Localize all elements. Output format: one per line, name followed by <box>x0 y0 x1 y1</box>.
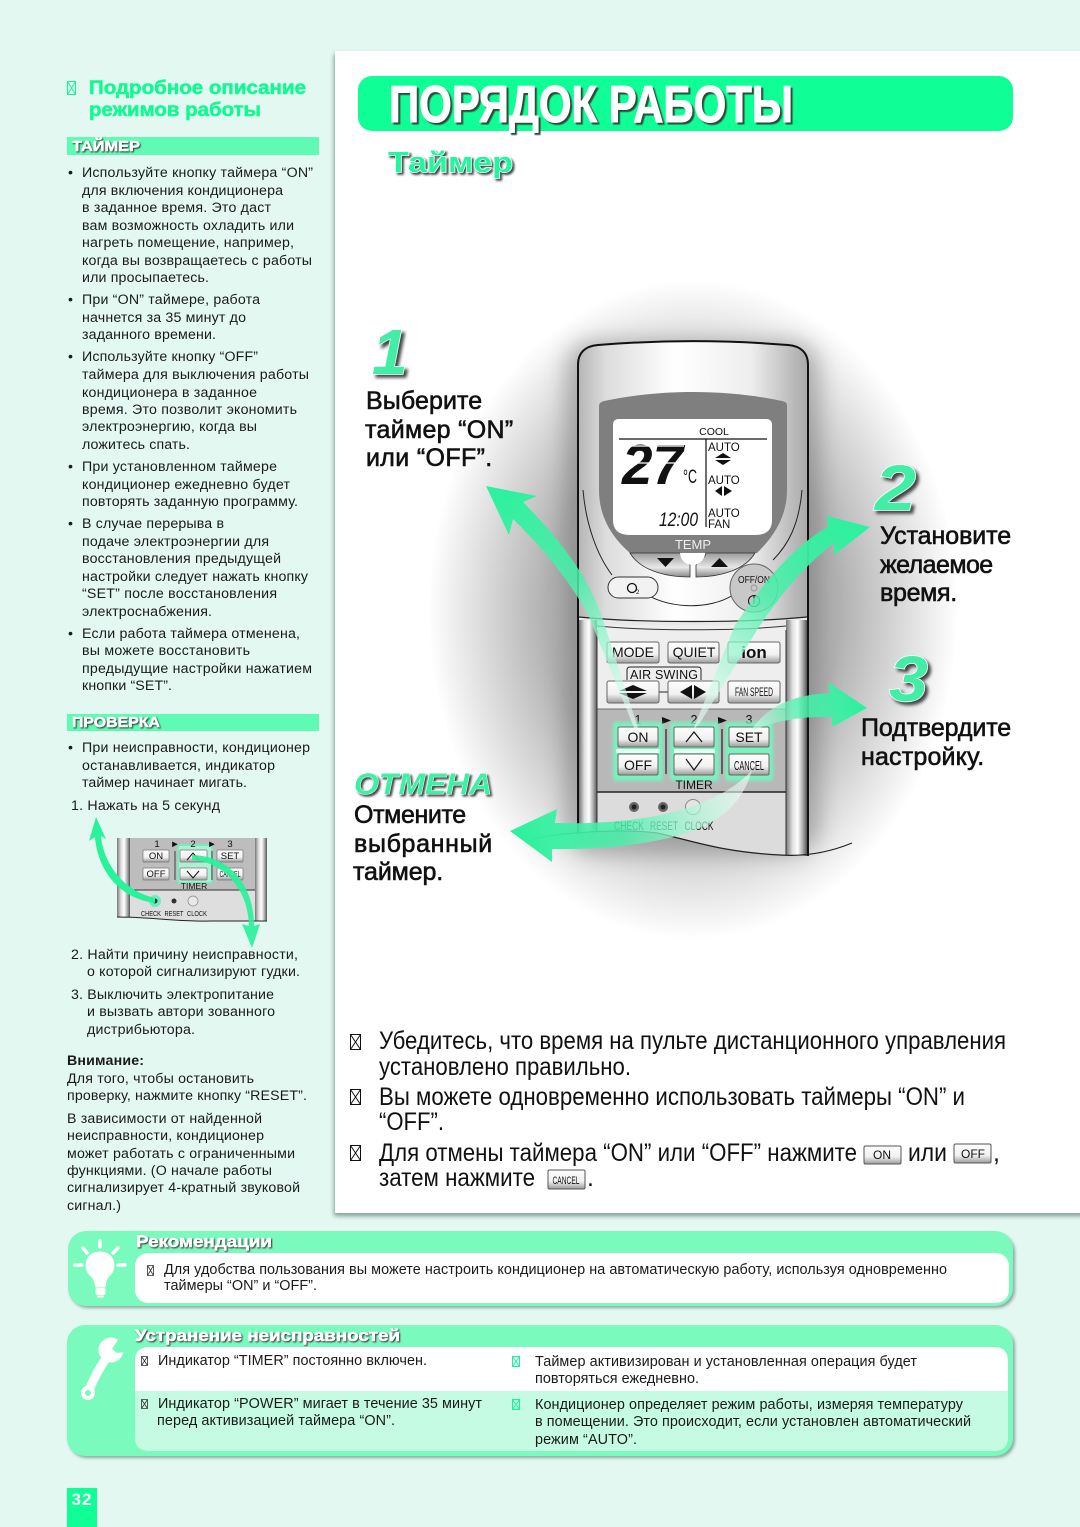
text block: timer instructions: • <box>68 516 73 532</box>
section bar: ТАЙМЕР: ТАЙМЕР <box>72 137 140 155</box>
mode buttons: AIR SWING <box>630 668 698 682</box>
inline ON key: ON <box>873 1148 891 1162</box>
text block: timer instructions: восстановления предыдущей <box>82 551 281 567</box>
notes list: Для отмены таймера “ON” или “OFF” нажмите <box>379 1139 857 1167</box>
text block: timer instructions: в заданное время. Это даст <box>82 200 272 216</box>
text block: timer instructions <box>68 165 313 694</box>
cancel text: выбранный <box>354 830 493 858</box>
text block: timer instructions: В случае перерыва в <box>82 516 224 532</box>
text block: check steps 2 and 3: 3. Выключить электропитание <box>71 987 274 1003</box>
mode buttons: ion <box>741 643 767 662</box>
step 2 number: 2 <box>874 452 916 524</box>
temp buttons <box>630 553 755 577</box>
text block: timer instructions: кондиционер ежедневно будет <box>82 477 290 493</box>
small remote diagram: ► <box>207 839 217 850</box>
small remote diagram: RESET <box>164 909 184 918</box>
small remote diagram: OFF <box>146 869 166 880</box>
step 1 text: таймер “ON” <box>365 416 514 444</box>
panel: recommendations <box>68 1231 1015 1308</box>
small remote diagram: 3 <box>227 839 233 850</box>
step 1 text <box>365 387 514 472</box>
text block: check instructions: таймер начинает мигать. <box>82 775 247 791</box>
indicators <box>614 800 714 833</box>
step 3 text: Подтвердите <box>861 714 1012 742</box>
text block: timer instructions: время. Это позволит экономить <box>82 402 297 418</box>
arrow: cancel <box>510 770 752 862</box>
cancel text: Отмените <box>354 801 467 829</box>
cancel text: таймер. <box>353 858 444 886</box>
sidebar heading: Подробное описание <box>89 77 306 99</box>
panel: troubleshooting <box>67 1325 1015 1458</box>
LCD screen: 12:00 <box>659 510 698 531</box>
text block: warning <box>67 1053 307 1214</box>
text block: timer instructions: ложитесь спать. <box>82 437 190 453</box>
text block: check steps 2 and 3: о которой сигнализируют гудки. <box>87 964 300 980</box>
text block: check steps 2 and 3: и вызвать автори зованного <box>87 1004 275 1020</box>
cancel text <box>353 801 493 886</box>
page number <box>67 1488 97 1527</box>
text block: timer instructions: или просыпаетесь. <box>82 270 209 286</box>
text block: timer instructions: • <box>68 165 73 181</box>
arrow: up from CHECK <box>89 817 155 903</box>
text block: check instructions: При неисправности, кондиционер <box>82 740 310 756</box>
text block: warning: сигнал.) <box>67 1198 121 1214</box>
text block: check steps 2 and 3: 2. Найти причину неисправности, <box>71 947 298 963</box>
indicators: CHECK <box>614 821 644 833</box>
step 2 text <box>880 522 1012 607</box>
LCD screen: FAN <box>708 519 730 531</box>
timer section: 2 <box>691 713 698 727</box>
panel: troubleshooting: Кондиционер определяет режим работы, измеряя температуру <box>535 1397 964 1413</box>
LCD screen: AUTO <box>708 442 740 454</box>
text block: check steps 2 and 3: дистрибьютора. <box>87 1022 195 1038</box>
text block: timer instructions: • <box>68 626 73 642</box>
icon: wrench <box>81 1337 126 1400</box>
text block: timer instructions: Используйте кнопку таймера “ON” <box>82 165 313 181</box>
text block: timer instructions: “SET” после восстановления <box>82 586 277 602</box>
inline OFF key <box>954 1144 991 1163</box>
text block: check steps 2 and 3 <box>71 947 300 1038</box>
text block: timer instructions: нагреть помещение, например, <box>82 235 294 251</box>
small remote diagram: CLOCK <box>187 909 207 918</box>
text block: check instructions: останавливается, индикатор <box>82 758 275 774</box>
step 1 text: Выберите <box>366 387 483 415</box>
timer section: ON <box>628 729 648 745</box>
text block: timer instructions: При установленном таймере <box>82 459 277 475</box>
LCD screen <box>613 419 772 535</box>
timer section: 3 <box>746 713 753 727</box>
text block: timer instructions: Используйте кнопку “OFF” <box>82 349 258 365</box>
LCD screen: AUTO <box>708 508 740 520</box>
notes list: Вы можете одновременно использовать таймеры “ON” и <box>379 1083 965 1111</box>
sidebar heading: режимов работы <box>89 99 261 121</box>
LCD screen: COOL <box>699 426 729 438</box>
small remote diagram: ON <box>149 851 163 862</box>
step 2 text: время. <box>880 579 958 607</box>
step 3 number: 3 <box>889 643 928 715</box>
text block: timer instructions: для включения кондиционера <box>82 183 283 199</box>
panel: troubleshooting: в помещении. Это происходит, если установлен автоматический <box>535 1414 971 1430</box>
text block: timer instructions: • <box>68 459 73 475</box>
timer mini button <box>608 577 658 598</box>
text block: timer instructions: вам возможность охладить или <box>82 218 294 234</box>
LCD screen: AUTO <box>708 475 740 487</box>
text block: timer instructions: повторять заданную программу. <box>82 494 298 510</box>
timer section: TIMER <box>675 778 713 792</box>
text block: warning: В зависимости от найденной <box>67 1111 262 1127</box>
icon: light bulb <box>75 1241 125 1296</box>
panel: troubleshooting: Индикатор “TIMER” постоянно включен. <box>158 1353 427 1369</box>
OFF/ON button: OFF/ON <box>738 574 770 586</box>
text block: timer instructions: При “ON” таймере, работа <box>82 292 260 308</box>
notes list: Убедитесь, что время на пульте дистанционного управления <box>379 1027 1006 1055</box>
small remote diagram: CANCEL <box>220 870 241 879</box>
panel: troubleshooting: режим “AUTO”. <box>535 1432 637 1448</box>
text block: timer instructions: электроснабжения. <box>82 604 212 620</box>
text block: timer instructions: заданного времени. <box>82 327 216 343</box>
timer section: 1 <box>635 713 642 727</box>
arrow: down from timer buttons <box>192 855 260 948</box>
small remote diagram: 2 <box>190 839 196 850</box>
small remote diagram: CHECK <box>141 909 161 918</box>
notes list <box>350 1027 1006 1192</box>
section bar: ТАЙМЕР <box>67 137 319 155</box>
inline OFF key: OFF <box>961 1147 985 1161</box>
indicators: CLOCK <box>684 821 714 833</box>
LCD screen: 27 <box>621 433 685 497</box>
mode buttons: FAN SPEED <box>735 685 773 699</box>
section bar: ПРОВЕРКА: ПРОВЕРКА <box>72 714 160 731</box>
panel: recommendations: таймеры “ON” и “OFF”. <box>164 1278 317 1294</box>
title banner: ПОРЯДОК РАБОТЫ <box>389 76 793 134</box>
text block: timer instructions: • <box>68 292 73 308</box>
panel: main white sheet <box>334 51 1080 1216</box>
step 1 number: 1 <box>372 316 408 388</box>
timer section: CANCEL <box>734 758 764 773</box>
inline CANCEL key: CANCEL <box>552 1175 580 1187</box>
text block: timer instructions: когда вы возвращаетесь с работы <box>82 253 312 269</box>
timer mini button: 2 <box>636 590 640 596</box>
text block: timer instructions: подаче электроэнергии для <box>82 534 269 550</box>
notes list: “OFF”. <box>379 1108 444 1136</box>
text block: warning: может работать с ограниченными <box>67 1146 295 1162</box>
text block: timer instructions: начнется за 35 минут до <box>82 310 246 326</box>
notes list: установлено правильно. <box>379 1053 631 1081</box>
text block: warning: функциями. (О начале работы <box>67 1163 272 1179</box>
text block: timer instructions: электроэнергию, когда вы <box>82 419 257 435</box>
text block: timer instructions: • <box>68 349 73 365</box>
step 3 text <box>861 714 1012 771</box>
text block: check instructions: 1. Нажать на 5 секунд <box>71 798 221 814</box>
mode buttons: MODE <box>612 644 654 660</box>
notes list: , <box>993 1139 1000 1167</box>
text block: check instructions <box>68 740 310 814</box>
text block: timer instructions: кондиционера в заданное <box>82 385 257 401</box>
mode buttons <box>607 642 780 703</box>
panel: troubleshooting: повторяться ежедневно. <box>535 1371 699 1387</box>
notes list: . <box>587 1164 594 1192</box>
small remote diagram: 1 <box>154 839 160 850</box>
inline ON key <box>864 1146 901 1164</box>
text block: warning: Внимание: <box>67 1053 144 1069</box>
panel: recommendations: Рекомендации <box>136 1233 272 1251</box>
timer section <box>613 713 773 792</box>
text block: check instructions: • <box>68 740 73 756</box>
text block: timer instructions: таймера для выключения работы <box>82 367 309 383</box>
remote casing <box>578 341 808 862</box>
panel: troubleshooting: Таймер активизирован и установленная операция будет <box>535 1354 917 1370</box>
text block: warning: проверку, нажмите кнопку “RESET”. <box>67 1088 307 1104</box>
text block: timer instructions: вы можете восстановить <box>82 643 250 659</box>
cancel heading: ОТМЕНА <box>354 768 492 801</box>
sidebar heading <box>68 77 306 121</box>
text block: warning: неисправности, кондиционер <box>67 1128 264 1144</box>
LCD screen: °C <box>683 467 697 488</box>
step 1 text: или “OFF”. <box>366 444 493 472</box>
subtitle: Таймер <box>388 147 513 179</box>
remote control illustration <box>533 341 852 862</box>
panel: troubleshooting: перед активизацией таймера “ON”. <box>157 1413 395 1429</box>
step 2 text: желаемое <box>880 551 994 579</box>
arrow: step 1 <box>486 486 638 730</box>
timer section: OFF <box>624 757 652 773</box>
timer section: SET <box>735 729 763 745</box>
text block: timer instructions: Если работа таймера отменена, <box>82 626 300 642</box>
small remote diagram: ► <box>170 839 180 850</box>
notes list: затем нажмите <box>379 1164 535 1192</box>
inline CANCEL key <box>548 1170 585 1189</box>
OFF/ON button <box>730 564 778 612</box>
arrow: step 2 <box>693 516 870 730</box>
text block: timer instructions: предыдущие настройки нажатием <box>82 661 312 677</box>
section bar: ПРОВЕРКА <box>67 714 319 731</box>
remote shadow glow <box>428 280 958 940</box>
arrow: step 3 <box>750 682 867 732</box>
remote control illustration: TEMP <box>675 537 711 552</box>
page number: 32 <box>72 1490 92 1509</box>
panel: troubleshooting: Индикатор “POWER” мигает в течение 35 минут <box>158 1396 482 1412</box>
small remote diagram <box>117 838 267 921</box>
casing bottom wave <box>533 831 852 855</box>
display bezel <box>599 392 787 553</box>
small remote diagram: SET <box>221 851 239 862</box>
step 2 text: Установите <box>880 522 1012 550</box>
notes list: или <box>908 1139 947 1167</box>
step 3 text: настройку. <box>861 743 985 771</box>
text block: timer instructions: настройки следует нажать кнопку <box>82 569 309 585</box>
indicators: RESET <box>650 821 678 833</box>
small remote diagram: TIMER <box>181 881 207 891</box>
panel: recommendations: Для удобства пользования вы можете настроить кондиционер на автоматическую работу, используя одновременно <box>164 1262 947 1278</box>
text block: warning: Для того, чтобы остановить <box>67 1071 254 1087</box>
mode buttons: QUIET <box>673 644 716 660</box>
text block: timer instructions: кнопки “SET”. <box>82 678 172 694</box>
text block: warning: сигнализирует 4-кратный звуковой <box>67 1180 300 1196</box>
panel: troubleshooting: Устранение неисправностей <box>135 1327 400 1345</box>
